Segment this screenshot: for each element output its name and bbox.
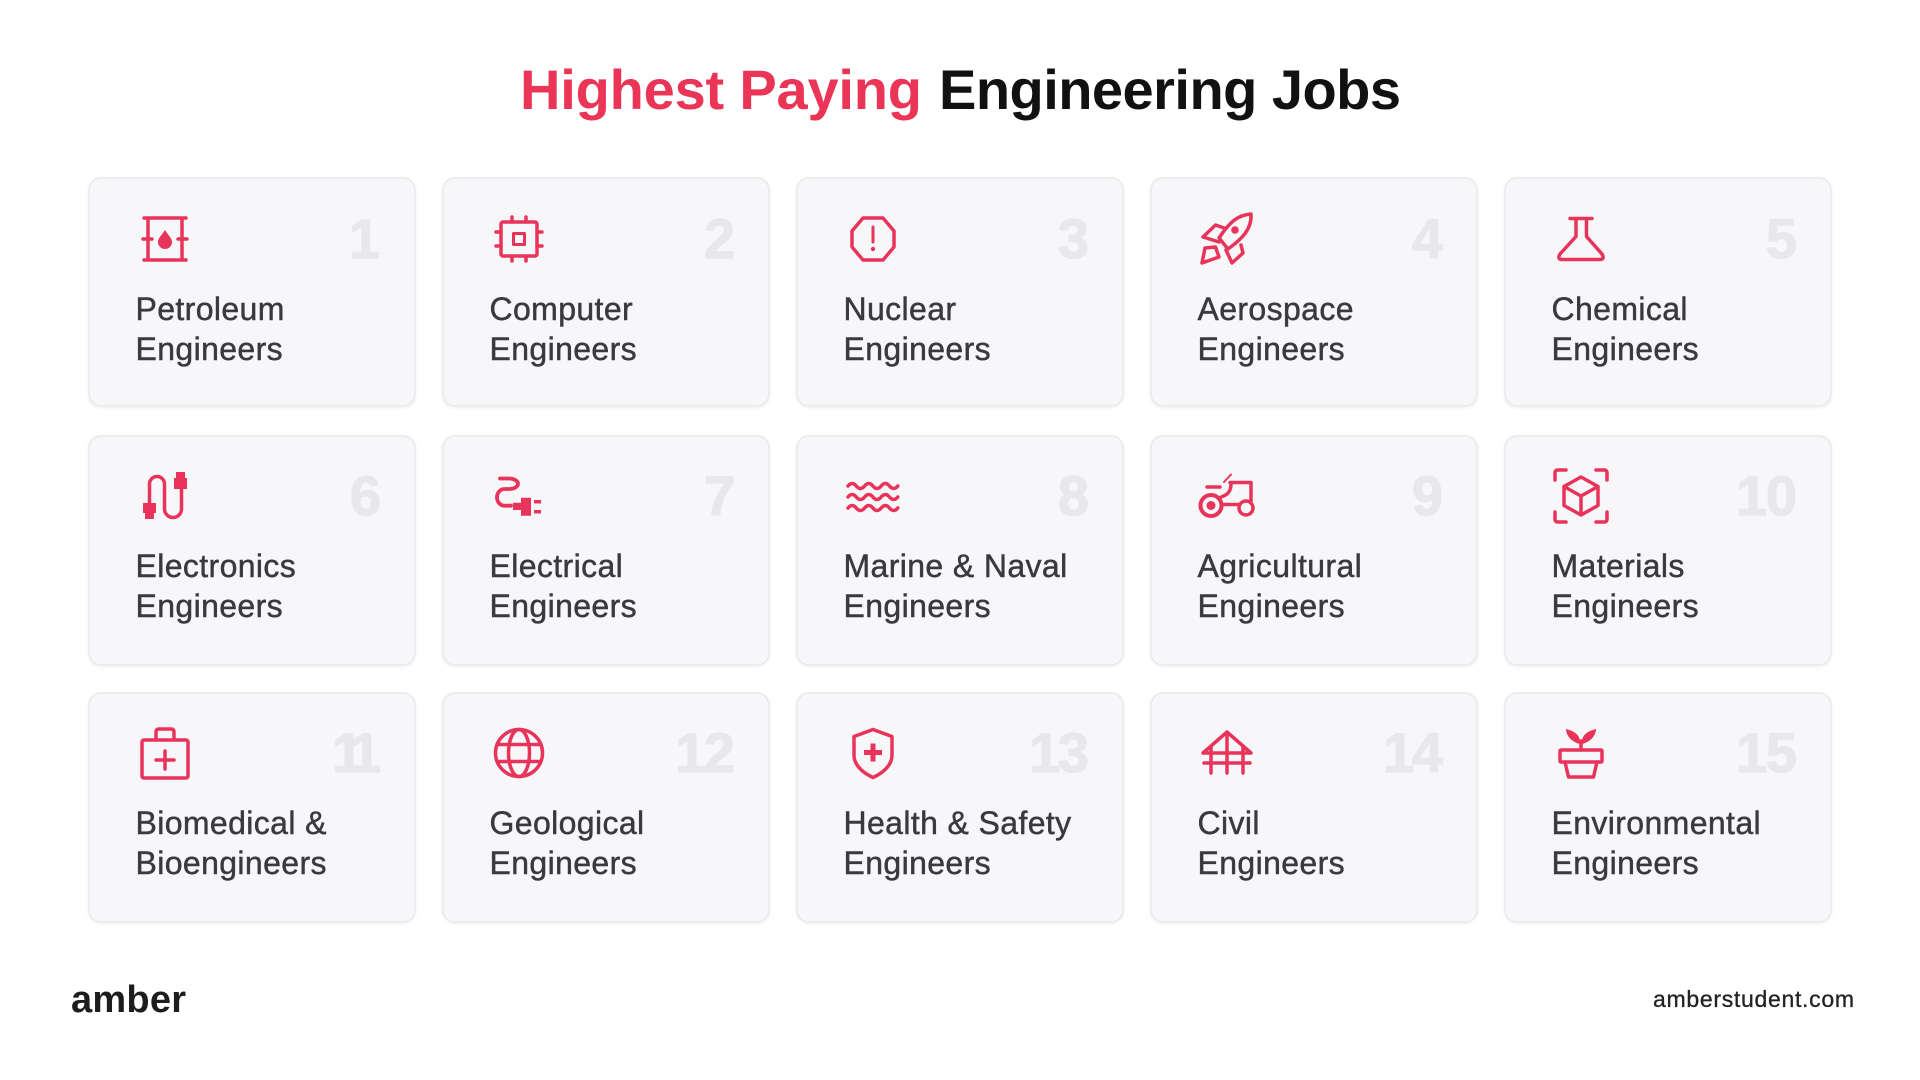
heading: Engineers — [844, 588, 991, 624]
heading: Bioengineers — [136, 845, 327, 881]
panel: Aerospace Engineers — [1151, 178, 1477, 406]
website: amberstudent.com — [1653, 986, 1854, 1012]
rank number: 15 — [1736, 721, 1797, 784]
panel: Petroleum Engineers — [89, 178, 415, 406]
rank number: 11 — [332, 721, 381, 784]
rank number: 6 — [350, 464, 381, 527]
icon: tractor — [1200, 474, 1253, 516]
heading: Engineers — [1198, 331, 1345, 367]
heading: Engineers — [1552, 331, 1699, 367]
rank number: 10 — [1736, 464, 1797, 527]
panel: Biomedical & Bioengineers — [89, 693, 415, 922]
heading: Engineers — [490, 331, 637, 367]
heading: Engineers — [136, 588, 283, 624]
panel: Chemical Engineers — [1505, 178, 1831, 406]
heading: Engineers — [1552, 588, 1699, 624]
heading: Nuclear — [844, 291, 956, 327]
icon: plug — [497, 478, 541, 516]
icon: first aid kit — [142, 729, 188, 778]
heading: Environmental — [1552, 805, 1761, 841]
icon: waves — [848, 484, 898, 510]
rank number: 3 — [1058, 207, 1089, 270]
heading: Agricultural — [1198, 548, 1362, 584]
heading: Civil — [1198, 805, 1260, 841]
heading: Chemical — [1552, 291, 1688, 327]
panel: Marine & Naval Engineers — [797, 436, 1123, 665]
rank number: 14 — [1383, 721, 1443, 784]
title: Engineering Jobs — [939, 58, 1401, 121]
heading: Engineers — [490, 845, 637, 881]
title — [520, 58, 1401, 121]
panel: Agricultural Engineers — [1151, 436, 1477, 665]
panel: Electronics Engineers — [89, 436, 415, 665]
rank number: 2 — [704, 207, 735, 270]
rank number: 7 — [704, 464, 735, 527]
heading: Health & Safety — [844, 805, 1072, 841]
heading: Engineers — [1552, 845, 1699, 881]
icon: oil barrel — [143, 218, 187, 260]
icon: cube in brackets — [1555, 470, 1607, 522]
icon: chip — [496, 217, 542, 261]
icon: flask — [1559, 218, 1603, 260]
panel: Health & Safety Engineers — [797, 693, 1123, 922]
icon: shield with cross — [854, 730, 892, 778]
heading: Electronics — [136, 548, 296, 584]
rank number: 9 — [1412, 464, 1443, 527]
title: Highest Paying — [520, 58, 922, 121]
heading: Engineers — [490, 588, 637, 624]
icon: potted plant — [1560, 729, 1602, 777]
panel: Geological Engineers — [443, 693, 769, 922]
heading: Geological — [490, 805, 645, 841]
panel: Materials Engineers — [1505, 436, 1831, 665]
heading: Engineers — [844, 845, 991, 881]
rank number: 4 — [1412, 207, 1443, 270]
heading: Aerospace — [1198, 291, 1354, 327]
icon: cable — [143, 472, 187, 519]
heading: Engineers — [1198, 845, 1345, 881]
icon: structure — [1203, 732, 1251, 773]
rank number: 1 — [349, 207, 380, 270]
heading: Petroleum — [136, 291, 285, 327]
panel: Computer Engineers — [443, 178, 769, 406]
heading: Engineers — [136, 331, 283, 367]
heading: Electrical — [490, 548, 623, 584]
heading: Engineers — [1198, 588, 1345, 624]
rank number: 13 — [1029, 721, 1089, 784]
heading: Engineers — [844, 331, 991, 367]
rank number: 8 — [1058, 464, 1089, 527]
heading: Marine & Naval — [844, 548, 1068, 584]
panel: Electrical Engineers — [443, 436, 769, 665]
heading: Computer — [490, 291, 633, 327]
logo: amber: amber — [71, 979, 186, 1021]
heading: Materials — [1552, 548, 1685, 584]
heading: Biomedical & — [136, 805, 327, 841]
panel: Nuclear Engineers — [797, 178, 1123, 406]
panel: Environmental Engineers — [1505, 693, 1831, 922]
icon: globe — [496, 730, 542, 776]
icon: rocket — [1202, 214, 1251, 263]
icon: warning octagon — [852, 218, 894, 260]
rank number: 5 — [1766, 207, 1797, 270]
panel: Civil Engineers — [1151, 693, 1477, 922]
rank number: 12 — [675, 721, 735, 784]
